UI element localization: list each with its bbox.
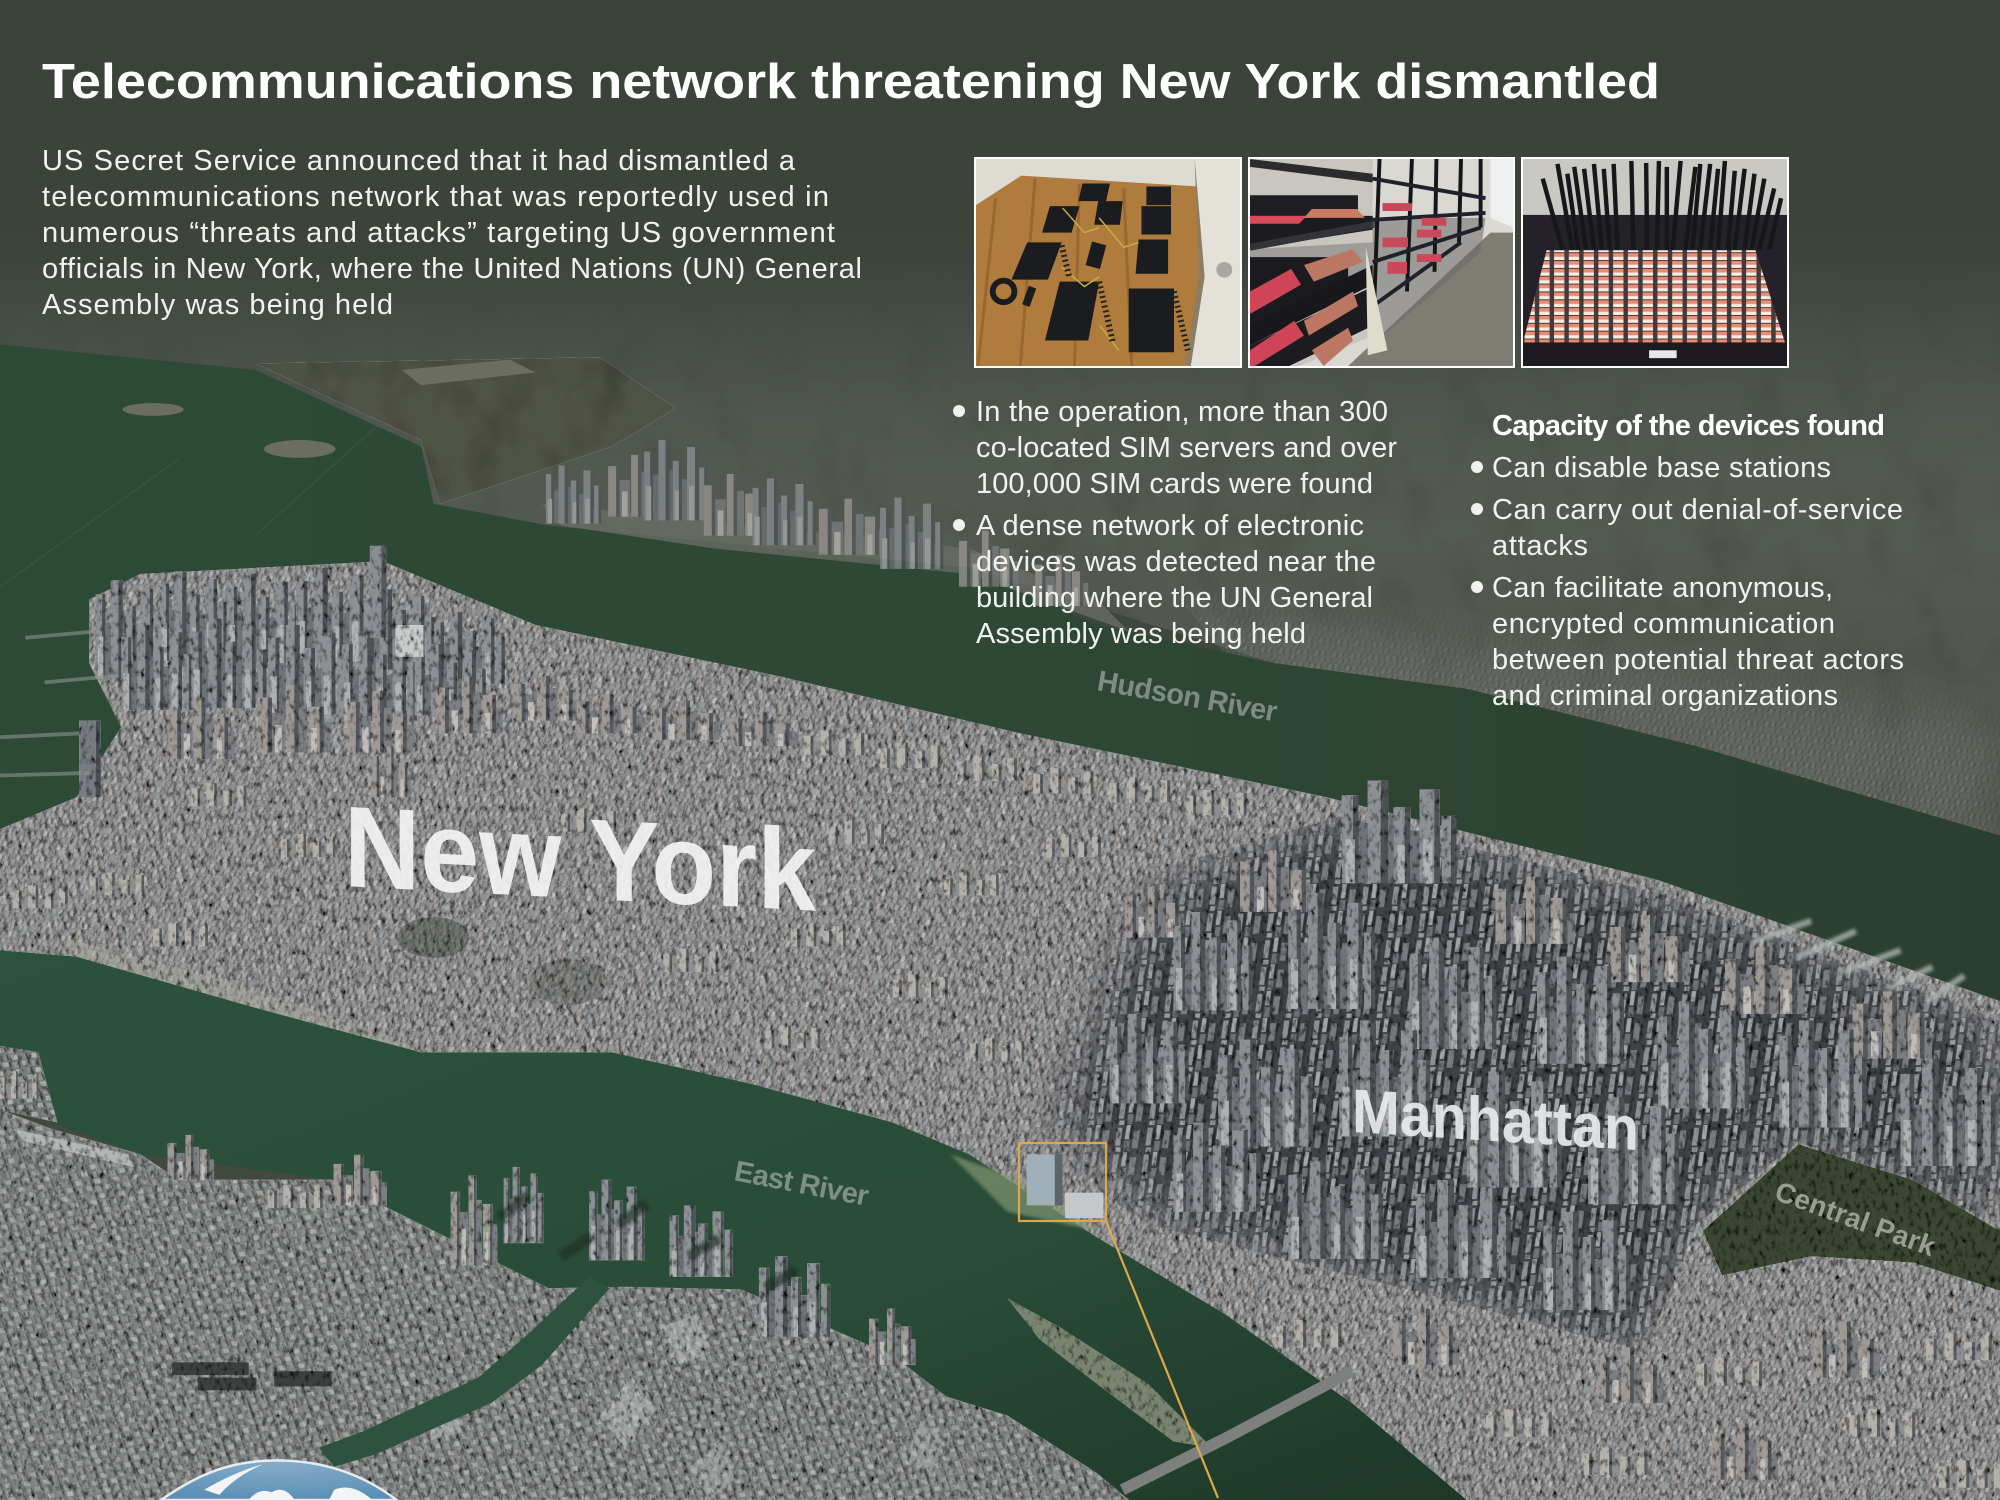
capacity heading: Capacity of the devices found [1492,410,1885,442]
capacity list [1471,410,1904,712]
capacity list: Can disable base stations [1492,452,1831,484]
photo: SIM card bank with antennas [1521,157,1789,368]
capacity list: between potential threat actors [1492,644,1904,676]
Lower Manhattan piers and bridges [0,631,140,946]
map label: Manhattan: Manhattan [1352,1077,1639,1164]
bullet dot [953,405,965,417]
bullet dot [1471,581,1483,593]
capacity list: Can facilitate anonymous, [1492,572,1833,604]
tower shadows on water [500,1195,796,1288]
bullet dot [1471,461,1483,473]
map label: New York: New York [344,783,816,936]
bullet list: operation findings: building where the UN General [976,582,1373,614]
intro paragraph: officials in New York, where the United Nations (UN) General [42,253,862,285]
photo: shelves of SIM servers [1248,157,1515,368]
bullet list: operation findings: In the operation, more than 300 [976,396,1388,428]
capacity list: Can carry out denial-of-service [1492,494,1903,526]
aerial map of New York [0,300,2000,1500]
map label: Central Park: Central Park [1771,1176,1940,1262]
capacity list: and criminal organizations [1492,680,1838,712]
bullet dot [953,519,965,531]
Hudson River [0,344,2000,1008]
towers [96,580,163,679]
Jersey City skyline [542,440,1129,631]
Liberty and Ellis islands [122,403,335,458]
city mass: Brooklyn and Manhattan [0,546,2000,1500]
Hudson water streaks [376,420,383,426]
sky and New Jersey shore [0,300,2000,1180]
map label: East River: East River [732,1155,871,1213]
UN headquarters buildings [1027,1154,1103,1218]
intro paragraph: telecommunications network that was reportedly used in [42,181,829,213]
Queens and Brooklyn waterfront [0,1046,1129,1500]
intro paragraph [42,145,862,321]
riverside park near UN [950,1154,1097,1231]
title: Telecommunications network threatening New York dismantled [42,55,1660,109]
Hudson piers [1754,921,1964,1001]
Queensboro bridge [1122,1371,1352,1490]
map label: Hudson River: Hudson River [1095,665,1280,728]
capacity list: attacks [1492,530,1588,562]
Newtown Creek [319,1277,610,1467]
bullet list: operation findings: Assembly was being held [976,618,1306,650]
bullet dot [1471,503,1483,515]
globe inset top [161,1460,397,1500]
Central Park [1703,1144,2000,1291]
intro paragraph: Assembly was being held [42,289,393,321]
intro paragraph: numerous “threats and attacks” targeting US government [42,217,835,249]
bullet list: operation findings [953,396,1397,650]
bullet list: operation findings: 100,000 SIM cards were found [976,468,1373,500]
East River [0,944,1480,1500]
bullet list: operation findings: A dense network of electronic [976,510,1364,542]
photo: SIM servers on wooden floor [974,157,1242,368]
intro paragraph: US Secret Service announced that it had dismantled a [42,145,796,177]
bullet list: operation findings: devices was detected near the [976,546,1376,578]
highlight box: UN building [1019,1143,1106,1221]
capacity list: encrypted communication [1492,608,1835,640]
Roosevelt Island [1008,1298,1212,1448]
leader line to inset [1106,1221,1218,1498]
bullet list: operation findings: co-located SIM servers and over [976,432,1397,464]
